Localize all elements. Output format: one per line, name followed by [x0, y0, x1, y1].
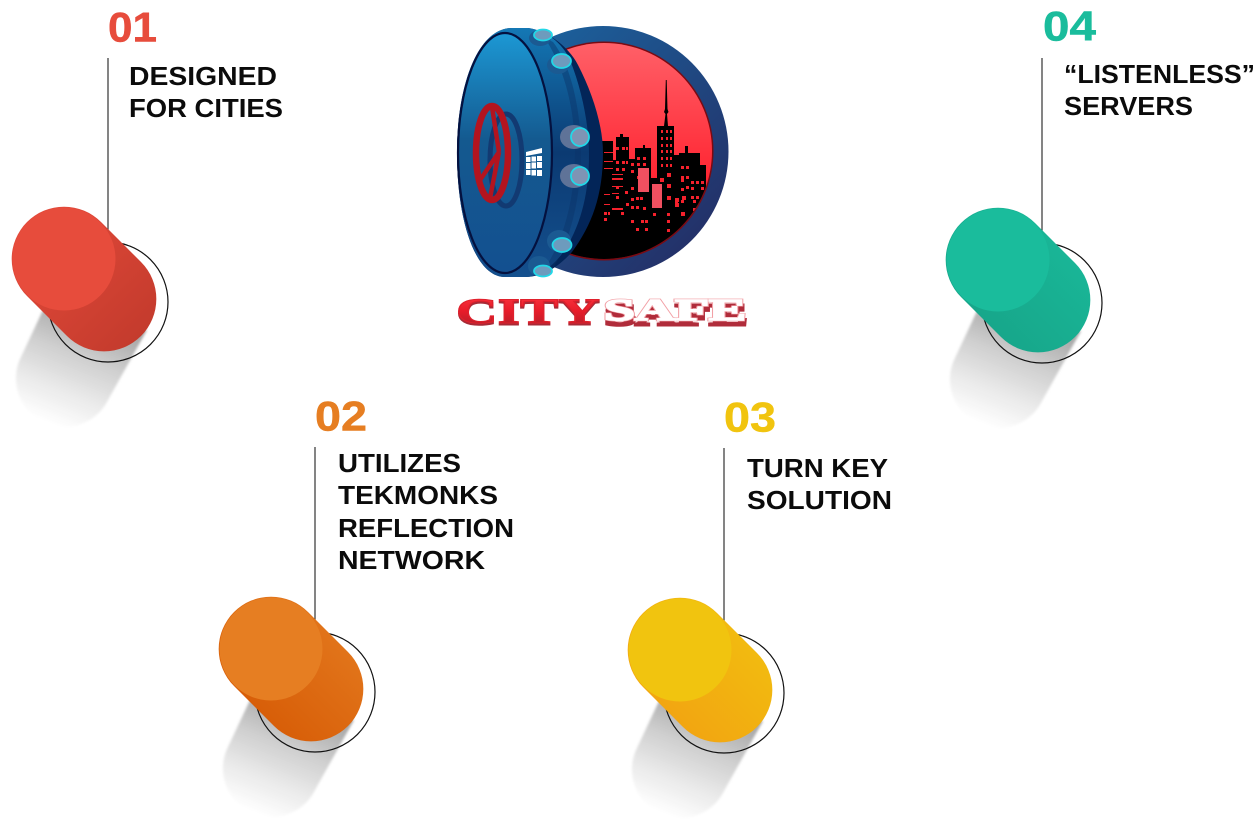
item 04: listenless servers	[946, 2, 1255, 428]
door rim band	[545, 38, 581, 268]
wordmark CITYSAFE: SAFE	[605, 297, 747, 332]
city view	[566, 42, 714, 260]
label 02: NETWORK	[338, 545, 485, 575]
label 02: REFLECTION	[338, 513, 514, 543]
label 02: UTILIZES	[338, 448, 461, 478]
number 04: 04	[1043, 2, 1097, 50]
pin 01	[12, 207, 168, 427]
label 03: SOLUTION	[747, 485, 892, 515]
item 02: utilizes tekmonks reflection network	[219, 392, 514, 817]
pin 02	[219, 597, 375, 817]
label 04: “LISTENLESS”	[1064, 59, 1255, 89]
wordmark CITYSAFE: CITY	[456, 291, 600, 331]
wordmark CITYSAFE: SAFE	[604, 292, 746, 327]
keypad icon	[526, 148, 542, 176]
wordmark CITYSAFE: SAFE	[604, 292, 746, 327]
number 03: 03	[724, 394, 776, 440]
logo: CitySafe vault	[456, 26, 747, 333]
hinge bolts	[528, 30, 589, 276]
connector line 02	[314, 447, 316, 630]
pin 04	[946, 208, 1102, 428]
label 03: TURN KEY	[747, 453, 888, 483]
number 02: 02	[315, 392, 367, 440]
label 04: SERVERS	[1064, 91, 1193, 121]
number 01: 01	[108, 4, 157, 50]
handwheel shadow	[490, 114, 522, 206]
label 01: DESIGNED	[129, 61, 277, 91]
door rim	[457, 28, 589, 277]
handwheel	[476, 106, 508, 200]
door face	[458, 33, 552, 273]
vault door	[457, 28, 603, 277]
connector line 04	[1041, 58, 1043, 241]
label 02: TEKMONKS	[338, 480, 498, 510]
label 01: FOR CITIES	[129, 93, 283, 123]
skyline	[570, 80, 706, 259]
wordmark CITYSAFE: CITY	[456, 293, 600, 333]
lit windows	[604, 130, 704, 232]
item 01: designed for cities	[12, 4, 283, 427]
pin 03	[628, 598, 784, 818]
connector line 01	[107, 58, 109, 240]
door dark back edge	[457, 28, 603, 277]
vault frame	[478, 26, 728, 277]
wordmark CITYSAFE	[456, 291, 747, 333]
connector line 03	[723, 448, 725, 631]
item 03: turn key solution	[628, 394, 892, 818]
